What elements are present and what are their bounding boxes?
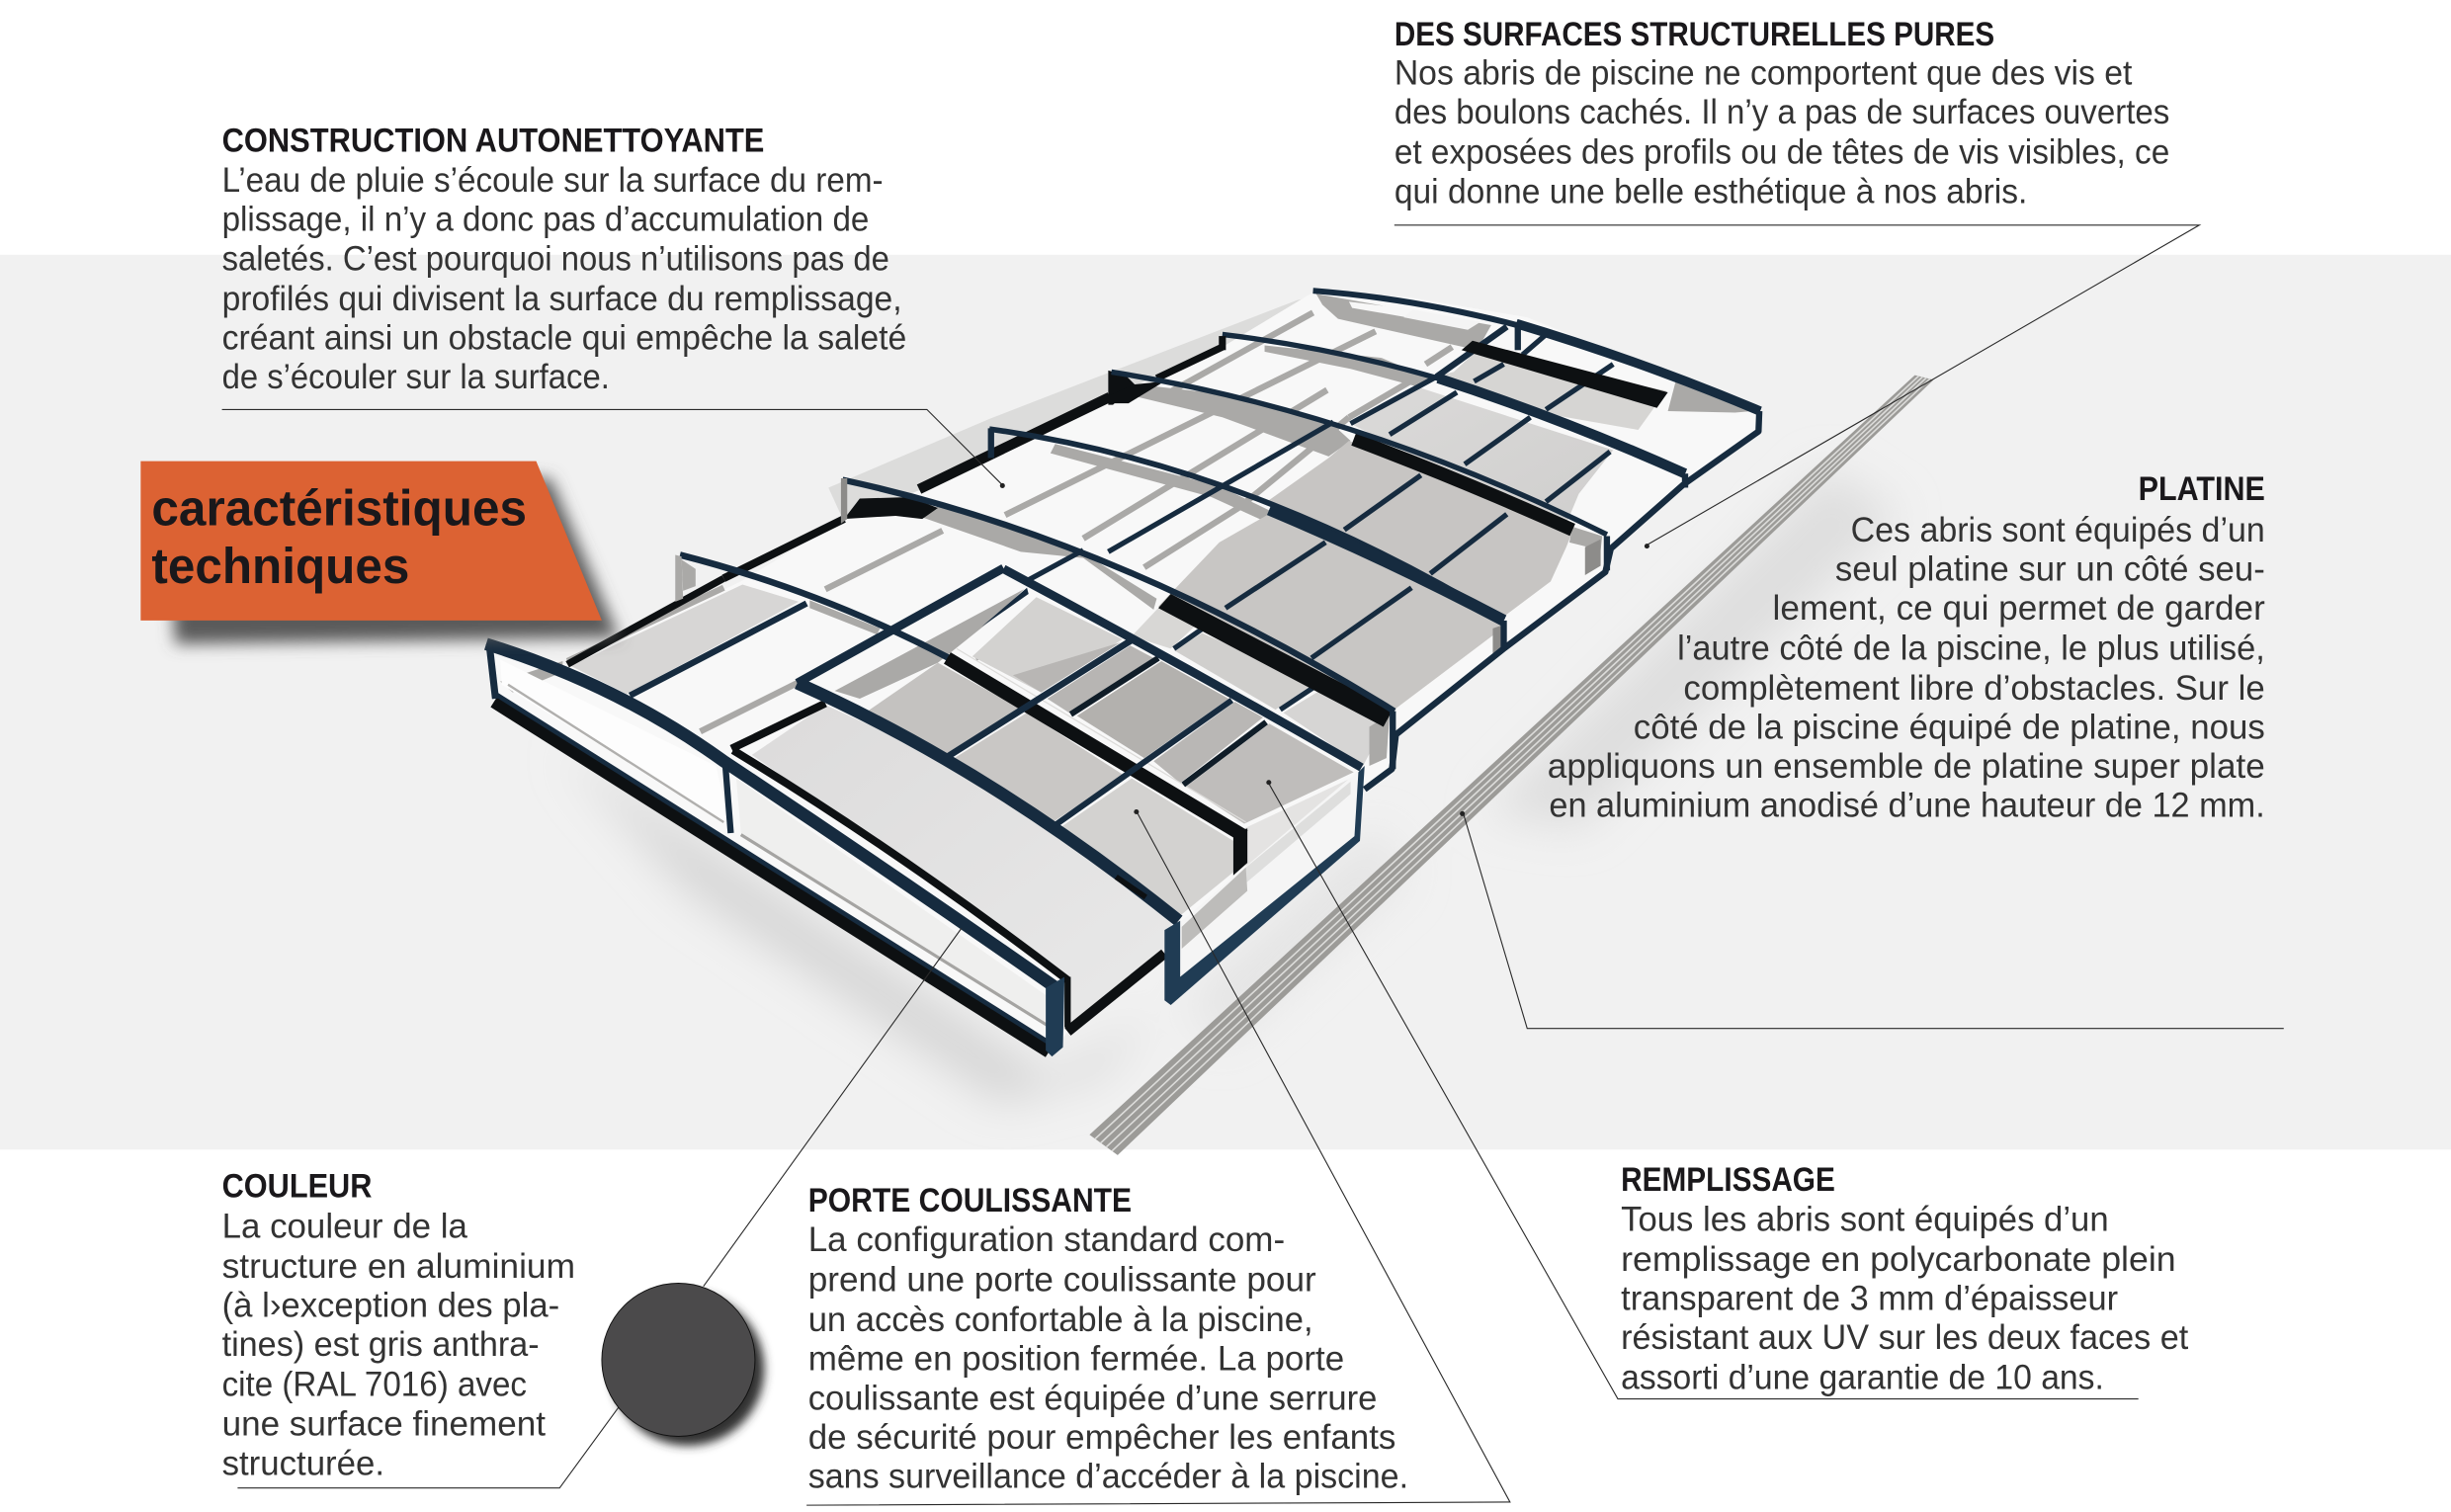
text block: remplissage: assorti d’une garantie de 10 ans. bbox=[1621, 1358, 2104, 1396]
callout lines bbox=[222, 225, 2284, 1505]
text block: porte coulissante: sans surveillance d’accéder à la piscine. bbox=[808, 1458, 1408, 1496]
title tag bbox=[140, 462, 602, 621]
text block: construction autonettoyante: L’eau de pluie s’écoule sur la surface du rem- bbox=[222, 161, 884, 200]
navy wedge behind door bbox=[981, 588, 1029, 627]
gray glass panels bbox=[570, 352, 1666, 766]
title tag: techniques bbox=[151, 538, 409, 594]
text block: remplissage: résistant aux UV sur les deux faces et bbox=[1621, 1318, 2189, 1357]
text block: platine: complètement libre d’obstacles. Sur le bbox=[1683, 669, 2265, 708]
text block: remplissage: transparent de 3 mm d’épaisseur bbox=[1621, 1279, 2118, 1317]
track rail bbox=[1089, 376, 1933, 1155]
text block: couleur: une surface finement bbox=[222, 1405, 546, 1444]
gray shadow bands under arcs bbox=[500, 294, 1752, 699]
text block: surfaces structurelles: et exposées des profils ou de têtes de vis visibles, ce bbox=[1395, 132, 2169, 171]
text block: platine: PLATINE bbox=[2139, 470, 2265, 508]
text block: couleur: structure en aluminium bbox=[222, 1247, 575, 1286]
text block: remplissage: remplissage en polycarbonate plein bbox=[1621, 1240, 2176, 1279]
text block: porte coulissante bbox=[808, 1182, 1408, 1496]
text block: platine: appliquons un ensemble de platine super plate bbox=[1548, 747, 2265, 786]
orange title shadow bbox=[166, 478, 619, 644]
text block: construction autonettoyante bbox=[222, 122, 906, 396]
text block: platine: lement, ce qui permet de garder bbox=[1773, 589, 2265, 628]
purlins between arcs bbox=[630, 327, 1613, 710]
text block: platine bbox=[1548, 470, 2265, 824]
rear posts bbox=[675, 336, 1223, 602]
front panel below door bbox=[752, 705, 1172, 1027]
glass body bbox=[486, 293, 1760, 1055]
front arch and lower frame bbox=[486, 644, 1164, 1056]
text block: platine: l’autre côté de la piscine, le plus utilisé, bbox=[1677, 629, 2265, 667]
text block: surfaces structurelles: DES SURFACES STRUCTURELLES PURES bbox=[1395, 16, 1994, 53]
text block: platine: Ces abris sont équipés d’un bbox=[1851, 511, 2265, 549]
text block: construction autonettoyante: CONSTRUCTION AUTONETTOYANTE bbox=[222, 122, 764, 159]
text block: couleur: La couleur de la bbox=[222, 1208, 467, 1246]
text block: surfaces structurelles bbox=[1395, 16, 2169, 211]
right base frame bbox=[1365, 411, 1759, 790]
text block: surfaces structurelles: qui donne une belle esthétique à nos abris. bbox=[1395, 173, 2027, 211]
text block: surfaces structurelles: Nos abris de piscine ne comportent que des vis et bbox=[1395, 53, 2133, 92]
text block: couleur: structurée. bbox=[222, 1444, 384, 1482]
door glass panels bbox=[868, 597, 1354, 914]
text block: construction autonettoyante: saletés. C’est pourquoi nous n’utilisons pas de bbox=[222, 240, 889, 279]
text block: couleur: (à l›exception des pla- bbox=[222, 1287, 559, 1325]
colour swatch bbox=[602, 1284, 764, 1446]
text block: porte coulissante: prend une porte coulissante pour bbox=[808, 1260, 1316, 1299]
text block: construction autonettoyante: créant ainsi un obstacle qui empêche la saleté bbox=[222, 318, 906, 357]
text block: couleur: COULEUR bbox=[222, 1168, 372, 1206]
back arcs bbox=[680, 291, 1760, 726]
soft ground shadows bbox=[562, 468, 1900, 1102]
text block: porte coulissante: un accès confortable à la piscine, bbox=[808, 1301, 1313, 1339]
text block: couleur: tines) est gris anthra- bbox=[222, 1325, 540, 1364]
title tag: caractéristiques bbox=[151, 479, 527, 536]
sliding door frame bbox=[798, 568, 1365, 1005]
text block: remplissage: REMPLISSAGE bbox=[1621, 1161, 1835, 1199]
text block: porte coulissante: PORTE COULISSANTE bbox=[808, 1182, 1132, 1219]
text block: platine: côté de la piscine équipé de platine, nous bbox=[1634, 708, 2265, 746]
text block: porte coulissante: même en position fermée. La porte bbox=[808, 1339, 1344, 1378]
text block: surfaces structurelles: des boulons cachés. Il n’y a pas de surfaces ouvertes bbox=[1395, 93, 2169, 131]
text block: platine: en aluminium anodisé d’une hauteur de 12 mm. bbox=[1549, 786, 2265, 824]
text block: construction autonettoyante: plissage, il n’y a donc pas d’accumulation de bbox=[222, 200, 869, 238]
text block: porte coulissante: La configuration standard com- bbox=[808, 1220, 1285, 1259]
translucent shading behind left rail bbox=[828, 297, 1313, 522]
background band bbox=[0, 255, 2451, 1149]
left rail bbox=[567, 347, 1223, 664]
text block: porte coulissante: coulissante est équipée d’une serrure bbox=[808, 1380, 1377, 1418]
text block: construction autonettoyante: de s’écouler sur la surface. bbox=[222, 358, 610, 396]
text block: couleur: cite (RAL 7016) avec bbox=[222, 1365, 527, 1403]
black track band bbox=[947, 648, 1246, 836]
pool enclosure structure bbox=[486, 291, 1760, 1056]
door purlins bbox=[947, 640, 1266, 828]
text block: remplissage bbox=[1621, 1161, 2189, 1396]
text block: construction autonettoyante: profilés qui divisent la surface du remplissage, bbox=[222, 280, 902, 318]
gray shadow purlins bbox=[567, 312, 1452, 731]
text block: porte coulissante: de sécurité pour empêcher les enfants bbox=[808, 1418, 1395, 1457]
text block: platine: seul platine sur un côté seu- bbox=[1835, 550, 2265, 589]
text block: couleur bbox=[222, 1168, 575, 1482]
text block: remplissage: Tous les abris sont équipés d’un bbox=[1621, 1201, 2109, 1239]
